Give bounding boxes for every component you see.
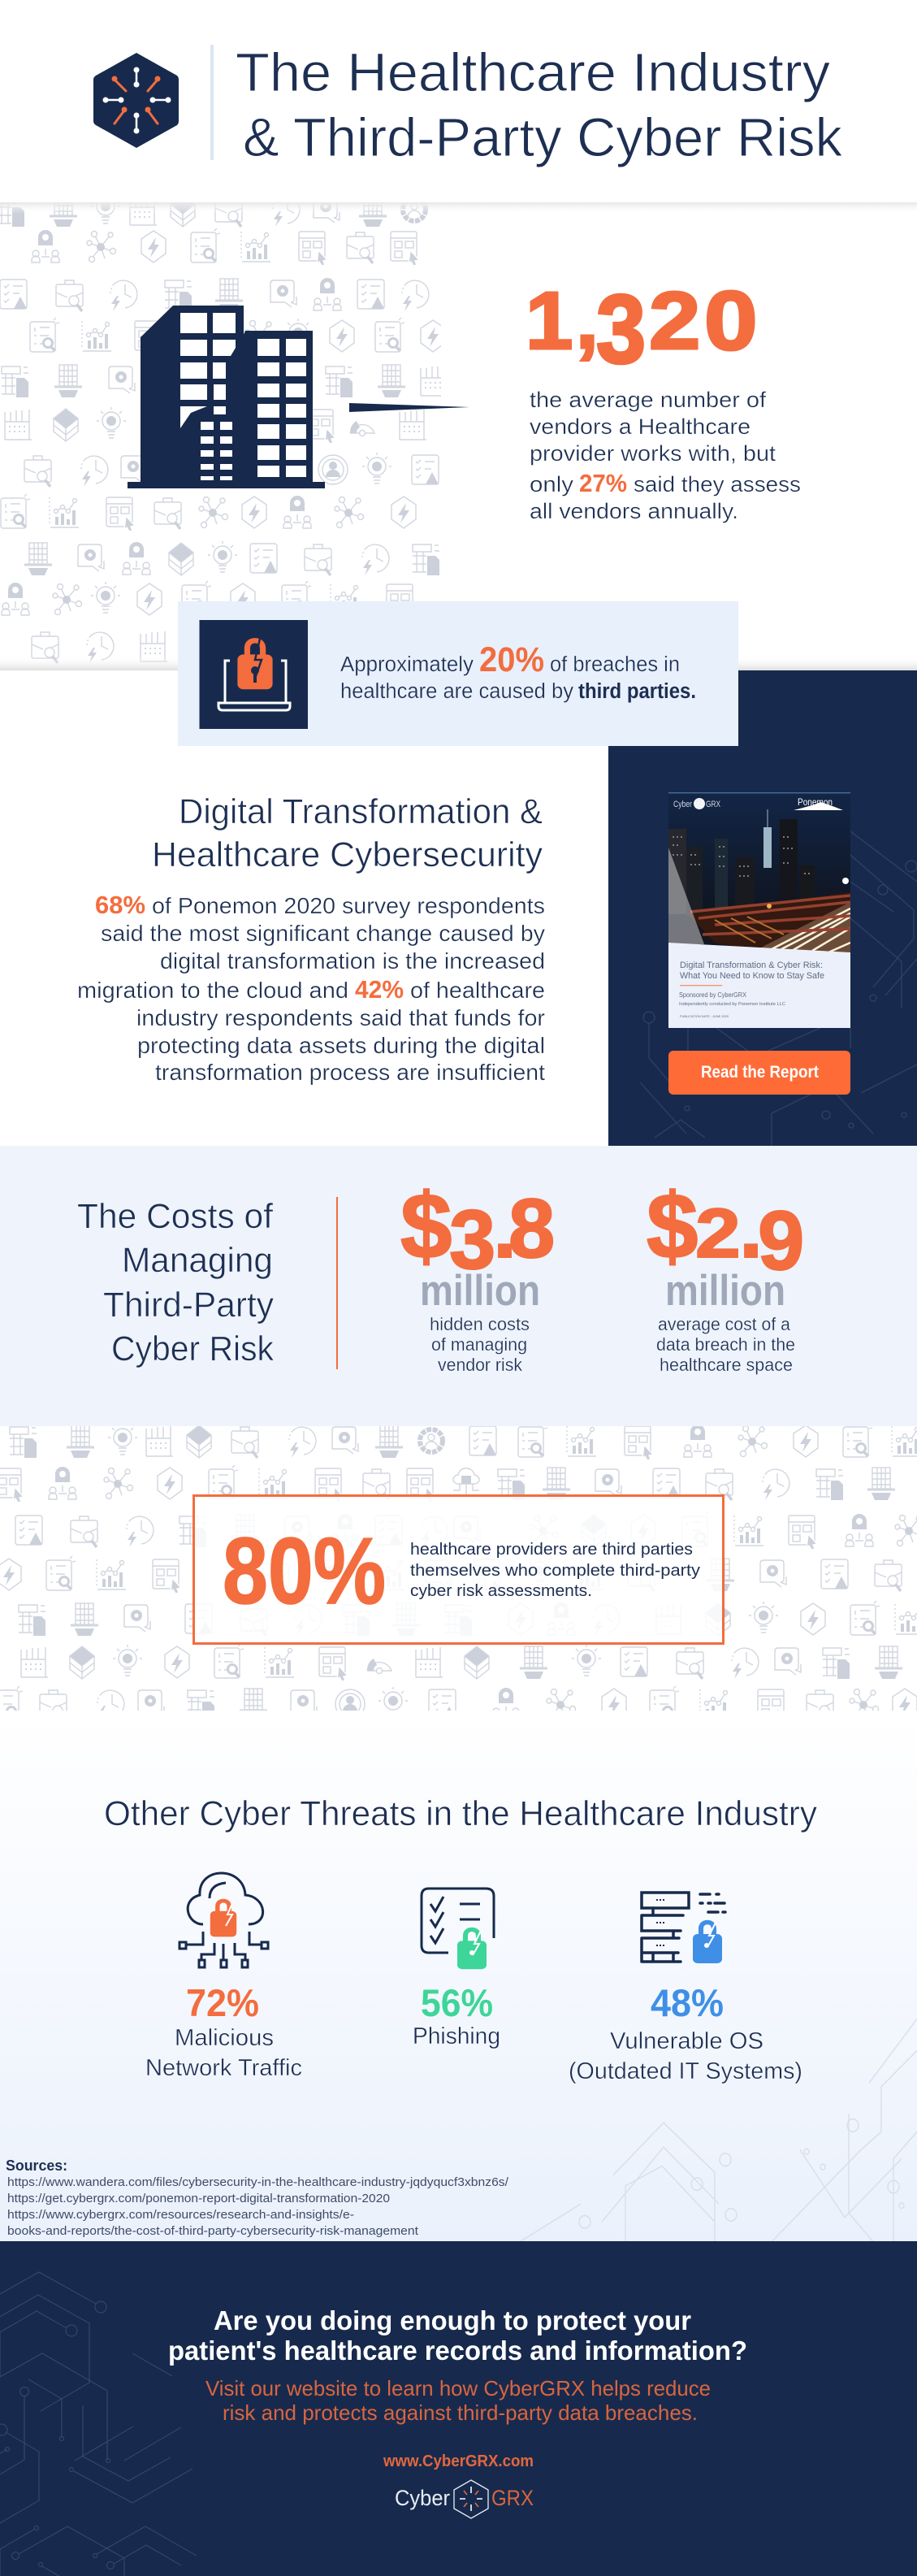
text block: Ponemon survey findings: migration to the cloud and	[77, 978, 348, 1003]
callout text: third parties.	[578, 680, 696, 703]
icon: laptop with broken lock	[200, 620, 308, 729]
heading: costs: Cyber Risk	[111, 1329, 274, 1368]
cover text: Independently conducted by Ponemon Institute LLC	[679, 1002, 785, 1007]
sources: books-and-reports/the-cost-of-third-party-cybersecurity-risk-management	[7, 2224, 419, 2238]
statistic: $3.8 million: .	[493, 1181, 517, 1276]
statistic: $3.8 million: 8	[508, 1182, 555, 1275]
headline: patient's healthcare records and information?	[168, 2335, 747, 2366]
description: hidden costs	[430, 1314, 530, 1334]
text block: Ponemon survey findings: 68%	[95, 891, 145, 919]
circuit trace decoration	[640, 831, 917, 1146]
heading: costs: Managing	[122, 1241, 273, 1280]
label: Vulnerable OS	[610, 2028, 763, 2054]
callout text: healthcare are caused by	[340, 680, 573, 703]
light circuit decoration	[520, 2019, 917, 2242]
icon: office buildings	[128, 306, 325, 488]
text block: Ponemon survey findings: industry respondents said that funds for	[136, 1005, 545, 1030]
callout text	[340, 640, 696, 703]
title	[236, 42, 842, 168]
pointer arrow to statistic	[349, 403, 469, 412]
text block: Ponemon survey findings: digital transformation is the increased	[160, 948, 545, 974]
subheadline	[205, 2376, 711, 2425]
header shadow	[0, 202, 917, 214]
statistic: $3.8 million	[400, 1175, 555, 1375]
panel: report sidebar	[608, 670, 917, 1146]
heading: digital transformation: Healthcare Cybersecurity	[152, 835, 543, 874]
text block: Ponemon survey findings: of healthcare	[410, 978, 545, 1003]
cover logos: Ponemon	[798, 796, 833, 808]
subheadline: risk and protects against third-party data breaches.	[223, 2400, 698, 2425]
button: read the report	[668, 1051, 850, 1095]
label: Network Traffic	[145, 2055, 302, 2081]
text block: Ponemon survey findings: protecting data assets during the digital	[137, 1033, 545, 1058]
description: themselves who complete third-party	[410, 1561, 701, 1580]
section bottom shadow	[0, 657, 917, 670]
callout text: 20%	[479, 640, 544, 679]
description: data breach in the	[656, 1334, 795, 1355]
description: healthcare space	[660, 1355, 793, 1375]
percent: 56%	[421, 1981, 493, 2024]
heading: costs	[77, 1197, 274, 1368]
description: cyber risk assessments.	[410, 1581, 592, 1600]
description: average vendors: 27%	[579, 469, 627, 497]
icon: cloud with broken lock	[180, 1873, 268, 1967]
CyberGRX logo: GRX	[491, 2486, 534, 2510]
icon pattern background	[0, 1423, 917, 1724]
website link: www.CyberGRX.com	[383, 2452, 534, 2470]
callout box	[193, 1495, 723, 1643]
description	[410, 1540, 701, 1600]
statistic: $3.8 million: $	[400, 1175, 452, 1278]
statistic: 1,320 vendors	[526, 275, 801, 523]
sources: https://www.cybergrx.com/resources/research-and-insights/e-	[7, 2208, 354, 2222]
description	[656, 1314, 795, 1375]
cover logos: GRX	[706, 800, 720, 809]
cover text: Sponsored by CyberGRX	[679, 991, 747, 999]
description: of managing	[431, 1334, 527, 1355]
cover logos	[673, 796, 843, 810]
panel: 80% third parties	[0, 1423, 917, 1724]
statistic: 1,320 vendors: 1	[526, 275, 573, 366]
statistic: $2.9 million: .	[739, 1181, 763, 1276]
threat: phishing	[413, 1889, 500, 2049]
description	[430, 1314, 530, 1375]
threat: malicious network traffic	[145, 1873, 302, 2081]
percent: 72%	[186, 1981, 259, 2024]
cover text: Digital Transformation & Cyber Risk:	[680, 961, 823, 970]
statistic: $2.9 million	[647, 1175, 804, 1375]
heading: costs: Third-Party	[103, 1286, 274, 1325]
callout text: of breaches in	[550, 653, 680, 676]
cover text	[679, 961, 824, 1018]
description: vendor risk	[438, 1355, 523, 1375]
cover text: PUBLICATION DATE : JUNE 2020	[680, 1015, 729, 1018]
callout: 20% of breaches	[178, 601, 738, 746]
text block: Ponemon survey findings: of Ponemon 2020 survey respondents	[152, 893, 545, 918]
cover text: What You Need to Know to Stay Safe	[680, 971, 824, 981]
sources: https://get.cybergrx.com/ponemon-report-digital-transformation-2020	[7, 2192, 390, 2205]
title: & Third-Party Cyber Risk	[243, 107, 842, 168]
label: Phishing	[413, 2023, 500, 2049]
percent: 48%	[651, 1981, 724, 2024]
description: average vendors: vendors a Healthcare	[530, 414, 750, 439]
icon: server stack with broken lock	[642, 1893, 725, 1963]
cover logos: Cyber	[673, 800, 692, 809]
header: logo and title	[0, 0, 917, 202]
subheadline: Visit our website to learn how CyberGRX helps reduce	[205, 2376, 711, 2400]
heading: other cyber threats: Other Cyber Threats in the Healthcare Industry	[104, 1794, 817, 1833]
description: average vendors	[530, 388, 801, 523]
vertical divider	[336, 1197, 338, 1369]
sources: Sources:	[6, 2158, 67, 2174]
title: The Healthcare Industry	[236, 42, 831, 103]
label	[145, 2025, 302, 2081]
panel: vendors section with icon pattern	[0, 193, 917, 670]
cover lower panel	[668, 943, 850, 1028]
circuit trace decoration	[0, 2272, 197, 2576]
heading: digital transformation	[152, 792, 543, 874]
icon: checklist with broken lock	[422, 1889, 494, 1969]
icon: CyberGRX hexagon logo	[93, 53, 179, 148]
heading: digital transformation: Digital Transformation &	[179, 792, 543, 831]
translucent shard	[668, 848, 704, 944]
sources: https://www.wandera.com/files/cybersecurity-in-the-healthcare-industry-jqdyqucf3xbnz6s/	[7, 2175, 509, 2189]
description: average vendors: only	[530, 472, 574, 497]
statistic: $2.9 million: million	[665, 1267, 785, 1315]
statistic: $3.8 million: 3	[449, 1193, 495, 1286]
text block: Ponemon survey findings: transformation process are insufficient	[155, 1060, 545, 1085]
lower background gradient	[0, 1711, 917, 2241]
statistic: $2.9 million: 9	[758, 1194, 804, 1287]
footer call to action	[0, 2241, 917, 2576]
text block: Ponemon survey findings: said the most significant change caused by	[101, 921, 545, 946]
statistic: $2.9 million: $	[647, 1175, 698, 1278]
threat: vulnerable OS	[569, 1893, 802, 2084]
bridge and light trails	[688, 892, 850, 952]
text block: Ponemon survey findings: 42%	[355, 975, 404, 1004]
CyberGRX logo	[395, 2480, 534, 2518]
statistic: 80%: 80%	[223, 1518, 386, 1624]
headline	[168, 2305, 747, 2366]
description: average vendors: all vendors annually.	[530, 499, 738, 523]
icon pattern background	[0, 193, 448, 663]
description: average vendors: said they assess	[634, 472, 801, 497]
sources	[6, 2158, 509, 2238]
headline: Are you doing enough to protect your	[214, 2305, 691, 2335]
statistic: $2.9 million: 2	[695, 1195, 741, 1272]
description: average vendors: provider works with, but	[530, 441, 776, 466]
description: average cost of a	[658, 1314, 790, 1334]
text block: Ponemon survey findings	[77, 891, 545, 1085]
description: average vendors: the average number of	[530, 388, 767, 412]
statistic: 1,320 vendors: 0	[704, 275, 758, 367]
statistic: 1,320 vendors: 3	[596, 275, 646, 384]
city skyline	[668, 809, 849, 916]
label	[569, 2028, 802, 2084]
heading: costs: The Costs of	[77, 1197, 274, 1236]
panel: costs of managing third-party cyber risk	[0, 1146, 917, 1426]
CyberGRX logo: Cyber	[395, 2486, 450, 2510]
label: Malicious	[175, 2025, 274, 2051]
description: healthcare providers are third parties	[410, 1540, 693, 1559]
report cover	[668, 792, 850, 1028]
button: read the report: Read the Report	[701, 1063, 819, 1082]
statistic: 1,320 vendors: 2	[649, 275, 700, 366]
statistic: $3.8 million: million	[420, 1267, 540, 1315]
callout text: Approximately	[340, 653, 474, 676]
statistic: 1,320 vendors: ,	[576, 275, 599, 366]
divider	[210, 45, 214, 160]
label: (Outdated IT Systems)	[569, 2058, 802, 2084]
